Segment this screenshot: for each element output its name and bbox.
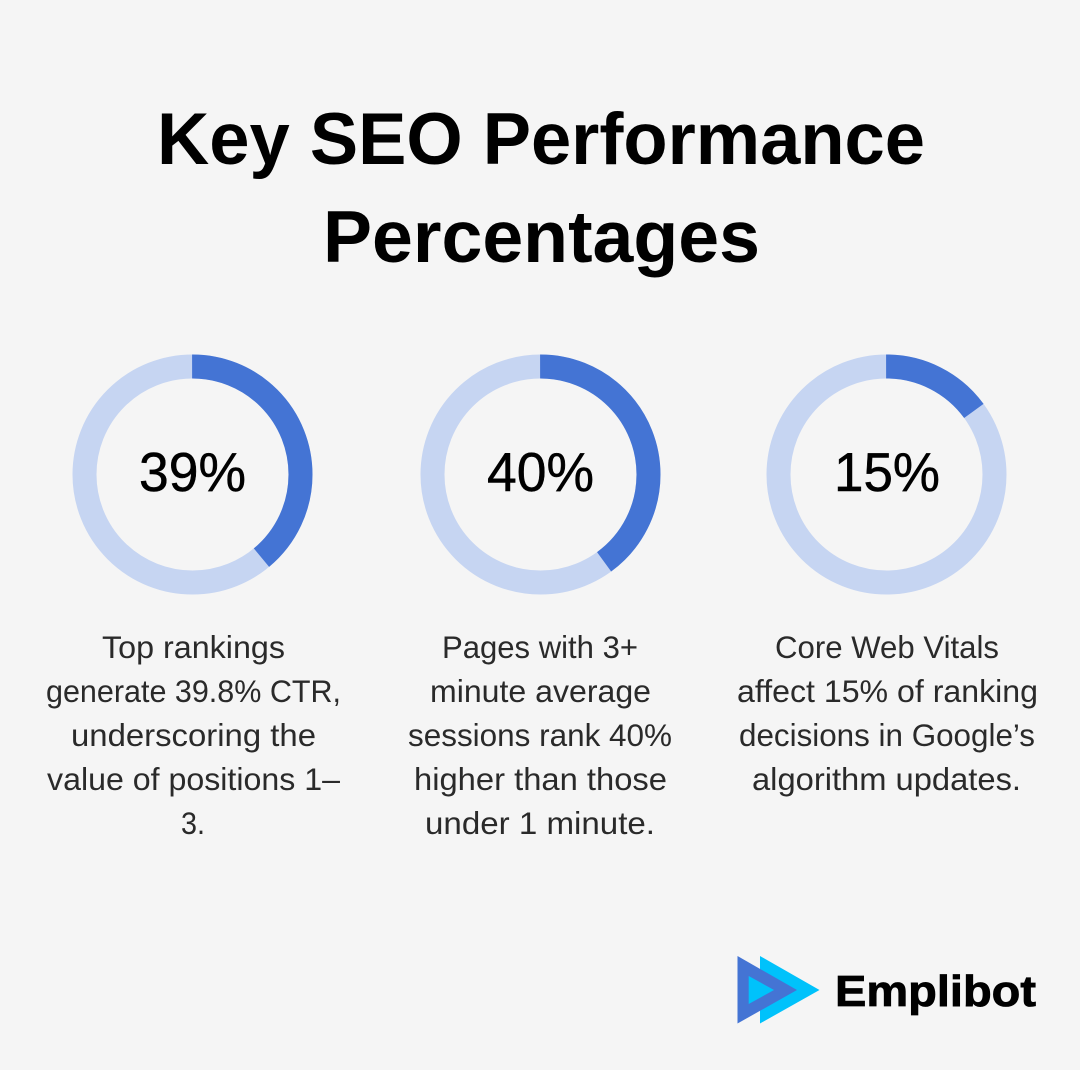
text block: core web vitals: algorithm updates. (752, 761, 1021, 797)
text block: top rankings: value of positions 1– (47, 761, 340, 797)
text block: core web vitals: Core Web Vitals (775, 629, 999, 665)
text block: top rankings: underscoring the (71, 717, 316, 753)
panel: 40% stat (408, 366, 672, 841)
donut chart: 40%: 40% (487, 441, 594, 503)
donut chart: 39%: 39% (139, 441, 246, 503)
title (157, 99, 925, 278)
logo wordmark: Emplibot (835, 967, 1036, 1016)
text block: core web vitals: affect 15% of ranking (737, 673, 1038, 709)
donut chart: 40% (432, 366, 648, 582)
panel: 15% stat (737, 366, 1038, 797)
donut chart: 15%: 15% (834, 441, 940, 503)
text block: top rankings: Top rankings (102, 629, 285, 665)
panel: 39% stat (46, 366, 341, 841)
text block: top rankings: 3. (181, 805, 205, 841)
text block: session length: under 1 minute. (425, 805, 655, 841)
text block: session length: minute average (430, 673, 651, 709)
title: Percentages (323, 197, 760, 278)
logo: Emplibot (738, 956, 1036, 1024)
text block: top rankings (46, 629, 341, 841)
text block: session length: sessions rank 40% (408, 717, 672, 753)
icon: play triangles (738, 956, 820, 1024)
text block: session length: Pages with 3+ (442, 629, 638, 665)
text block: core web vitals (737, 629, 1038, 797)
title: Key SEO Performance (157, 99, 925, 180)
text block: core web vitals: decisions in Google’s (739, 717, 1035, 753)
donut chart: 15% (778, 366, 994, 582)
text block: session length: higher than those (414, 761, 667, 797)
donut chart: 39% (84, 366, 300, 582)
text block: top rankings: generate 39.8% CTR, (46, 673, 341, 709)
text block: session length (408, 629, 672, 841)
